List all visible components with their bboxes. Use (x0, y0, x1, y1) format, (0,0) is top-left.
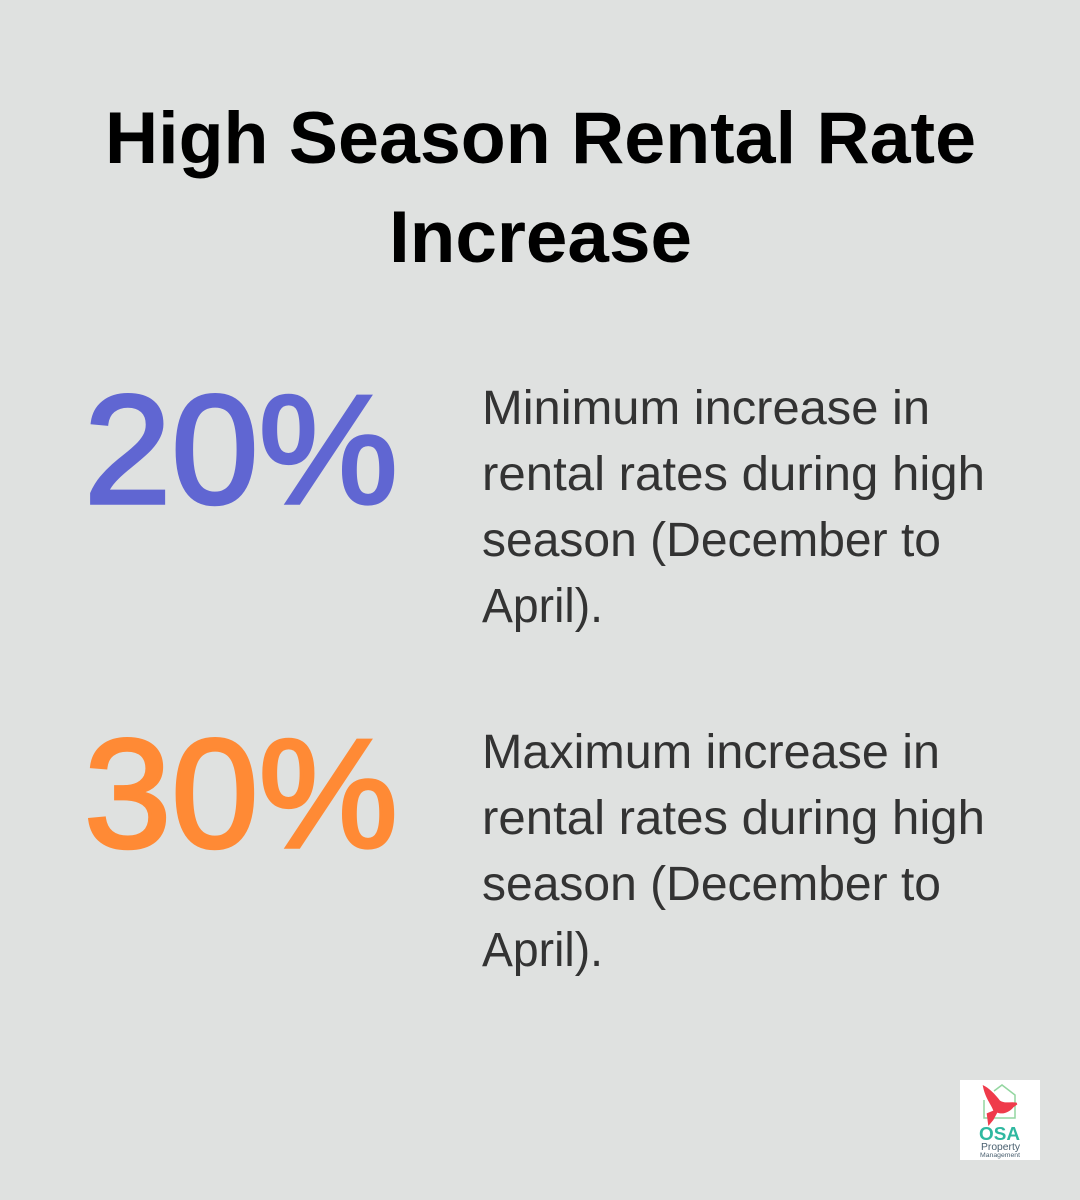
stat: 30%: 30% (84, 707, 398, 880)
stat: 20%: 20% (84, 363, 398, 536)
text: Property: Property (981, 1142, 1020, 1153)
text: maximum increase description: April). (482, 924, 603, 977)
text: maximum increase description (482, 726, 985, 977)
title: High Season Rental Rate (105, 98, 976, 179)
text: maximum increase description: rental rates during high (482, 792, 985, 845)
text: minimum increase description: Minimum increase in (482, 382, 930, 435)
title: Increase (389, 197, 692, 278)
text: maximum increase description: season (December to (482, 858, 941, 911)
text: minimum increase description: rental rates during high (482, 448, 985, 501)
text: OSA: OSA (979, 1124, 1020, 1144)
text: Management: Management (980, 1153, 1020, 1159)
title (105, 98, 976, 278)
text: minimum increase description: season (December to (482, 514, 941, 567)
text: minimum increase description (482, 382, 985, 633)
text: maximum increase description: Maximum increase in (482, 726, 940, 779)
logo: OSA Property Management (960, 1080, 1040, 1160)
icon: red bird (983, 1085, 1017, 1126)
text: minimum increase description: April). (482, 580, 603, 633)
icon: house outline (984, 1085, 1015, 1118)
